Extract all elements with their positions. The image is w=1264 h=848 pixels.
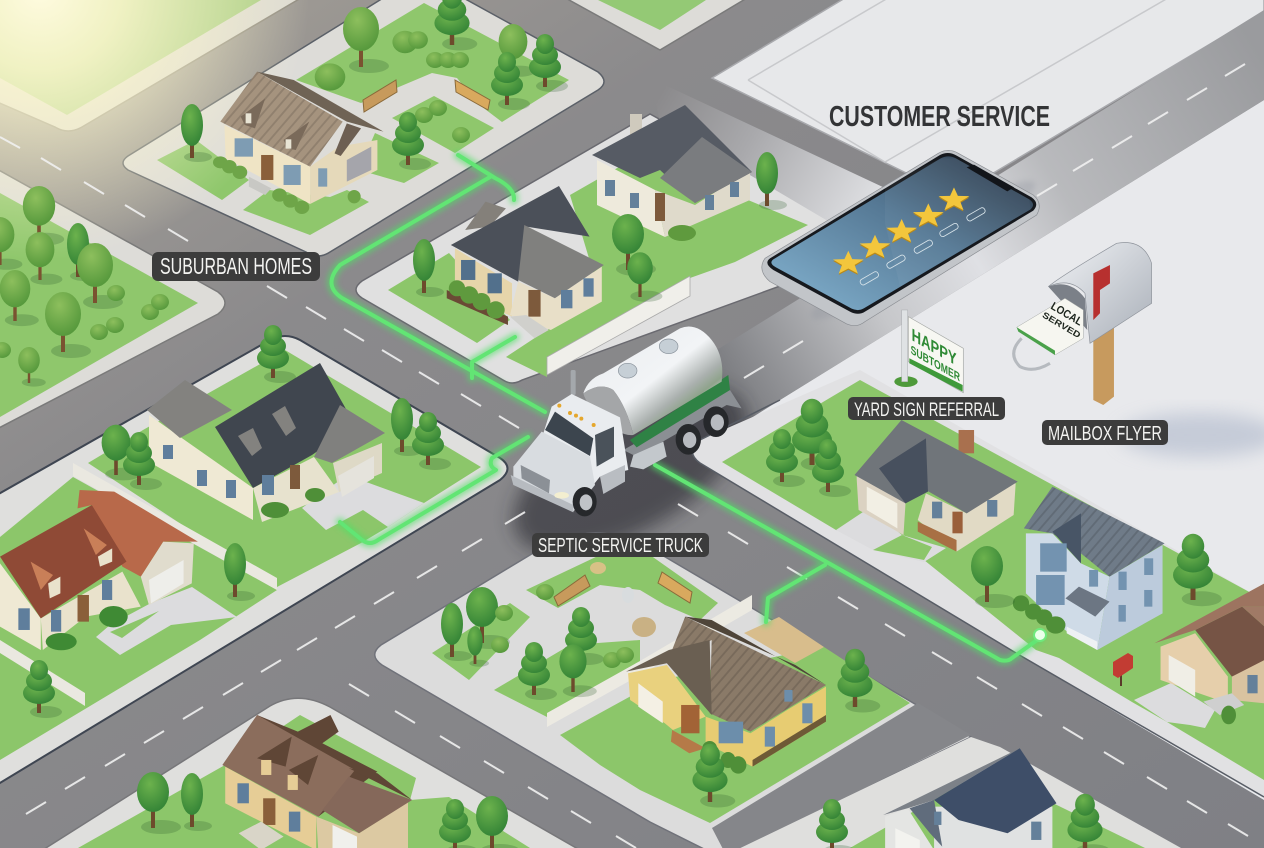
septic service truck bbox=[511, 327, 742, 516]
block: bottom right bbox=[730, 737, 1190, 848]
block: left lawn with trees bbox=[0, 168, 225, 430]
heading: customer service: CUSTOMER SERVICE bbox=[829, 101, 1050, 133]
cab bbox=[543, 394, 628, 485]
mailbox with flyer: SERVED bbox=[1040, 310, 1082, 341]
yard sign: SUBTOMER bbox=[911, 342, 960, 385]
stars bbox=[833, 251, 864, 275]
road: lower right white plaza bbox=[693, 100, 1264, 800]
road: side street bbox=[712, 703, 971, 848]
lawn: red house bbox=[0, 477, 277, 760]
house: brown roof at bottom bbox=[222, 715, 412, 848]
hood and grille bbox=[513, 432, 595, 512]
driveway: large house bbox=[302, 475, 424, 530]
house: large dark roof on left bbox=[147, 363, 385, 522]
label: yard sign referral bbox=[848, 397, 1005, 421]
block: houses lawn on right bbox=[692, 370, 1264, 797]
garden benches bbox=[363, 80, 692, 637]
label: suburban homes bbox=[152, 252, 320, 281]
lawn: park left bbox=[432, 603, 530, 680]
truck frame and hoses bbox=[623, 390, 742, 457]
driveways bbox=[836, 508, 946, 562]
mailbox shadow bbox=[1120, 413, 1264, 457]
house: blue roof at bottom right bbox=[883, 748, 1056, 848]
block: top-centre lawn bbox=[560, 0, 752, 50]
wood deck bbox=[744, 617, 824, 663]
label: suburban homes: SUBURBAN HOMES bbox=[160, 253, 312, 279]
tank bbox=[583, 327, 722, 435]
mailbox with flyer bbox=[1014, 242, 1152, 405]
notch bbox=[967, 165, 1014, 191]
block: top-left lawn bbox=[0, 0, 306, 131]
sunlight glow bbox=[0, 0, 360, 300]
lawn: yellow house bbox=[560, 647, 910, 823]
lawn: park top bbox=[526, 555, 718, 620]
block: houses on mid left bbox=[0, 336, 508, 786]
road: main road fading under phone bbox=[660, 10, 1264, 450]
block: bottom left bbox=[38, 698, 585, 848]
yard sign bbox=[894, 310, 963, 393]
house: dark roof near truck bbox=[447, 186, 604, 338]
concrete wall bbox=[547, 595, 752, 727]
lawn: behind large house bbox=[88, 350, 481, 587]
label: mailbox flyer: MAILBOX FLYER bbox=[1048, 423, 1162, 445]
block: top-right customer service plaza bbox=[712, 0, 1264, 192]
label: septic service truck bbox=[532, 533, 709, 557]
mailbox door loop bbox=[1014, 338, 1050, 369]
lawn: park lower bbox=[494, 640, 640, 717]
house: red roof bbox=[0, 490, 198, 650]
block: park and yellow house bbox=[375, 533, 971, 848]
house: brown roof at top bbox=[213, 72, 384, 214]
low retaining wall bbox=[547, 276, 690, 375]
road: fading to customer service area bbox=[650, 78, 900, 240]
mailbox with flyer: LOCAL bbox=[1049, 300, 1085, 328]
label: septic service truck: SEPTIC SERVICE TRUCK bbox=[538, 535, 703, 557]
house: brown roof on right edge bbox=[1154, 583, 1264, 724]
house: blue-grey two storey bbox=[1013, 487, 1165, 650]
service route: green glowing lines bbox=[331, 155, 1046, 661]
house: dark roof upper centre bbox=[592, 105, 752, 241]
wheels bbox=[703, 406, 729, 437]
rating pills bbox=[859, 207, 986, 286]
yard sign: HAPPY bbox=[912, 324, 957, 370]
label: yard sign referral: YARD SIGN REFERRAL bbox=[854, 400, 999, 421]
truck shadow on the intersection bbox=[487, 353, 773, 587]
block: central upper with house and garden bbox=[123, 0, 604, 256]
block: central with two houses bbox=[356, 114, 890, 383]
boundary wall bbox=[73, 463, 277, 590]
house: yellow walls bbox=[626, 617, 826, 774]
exhaust bbox=[571, 370, 576, 395]
phone with star rating bbox=[762, 150, 1045, 334]
driveway: red house bbox=[96, 587, 237, 655]
red mailbox on lawn bbox=[1113, 653, 1133, 686]
label: mailbox flyer bbox=[1042, 420, 1168, 445]
fuel tank bbox=[630, 442, 667, 469]
house: grey roof with chimney bbox=[855, 420, 1018, 552]
